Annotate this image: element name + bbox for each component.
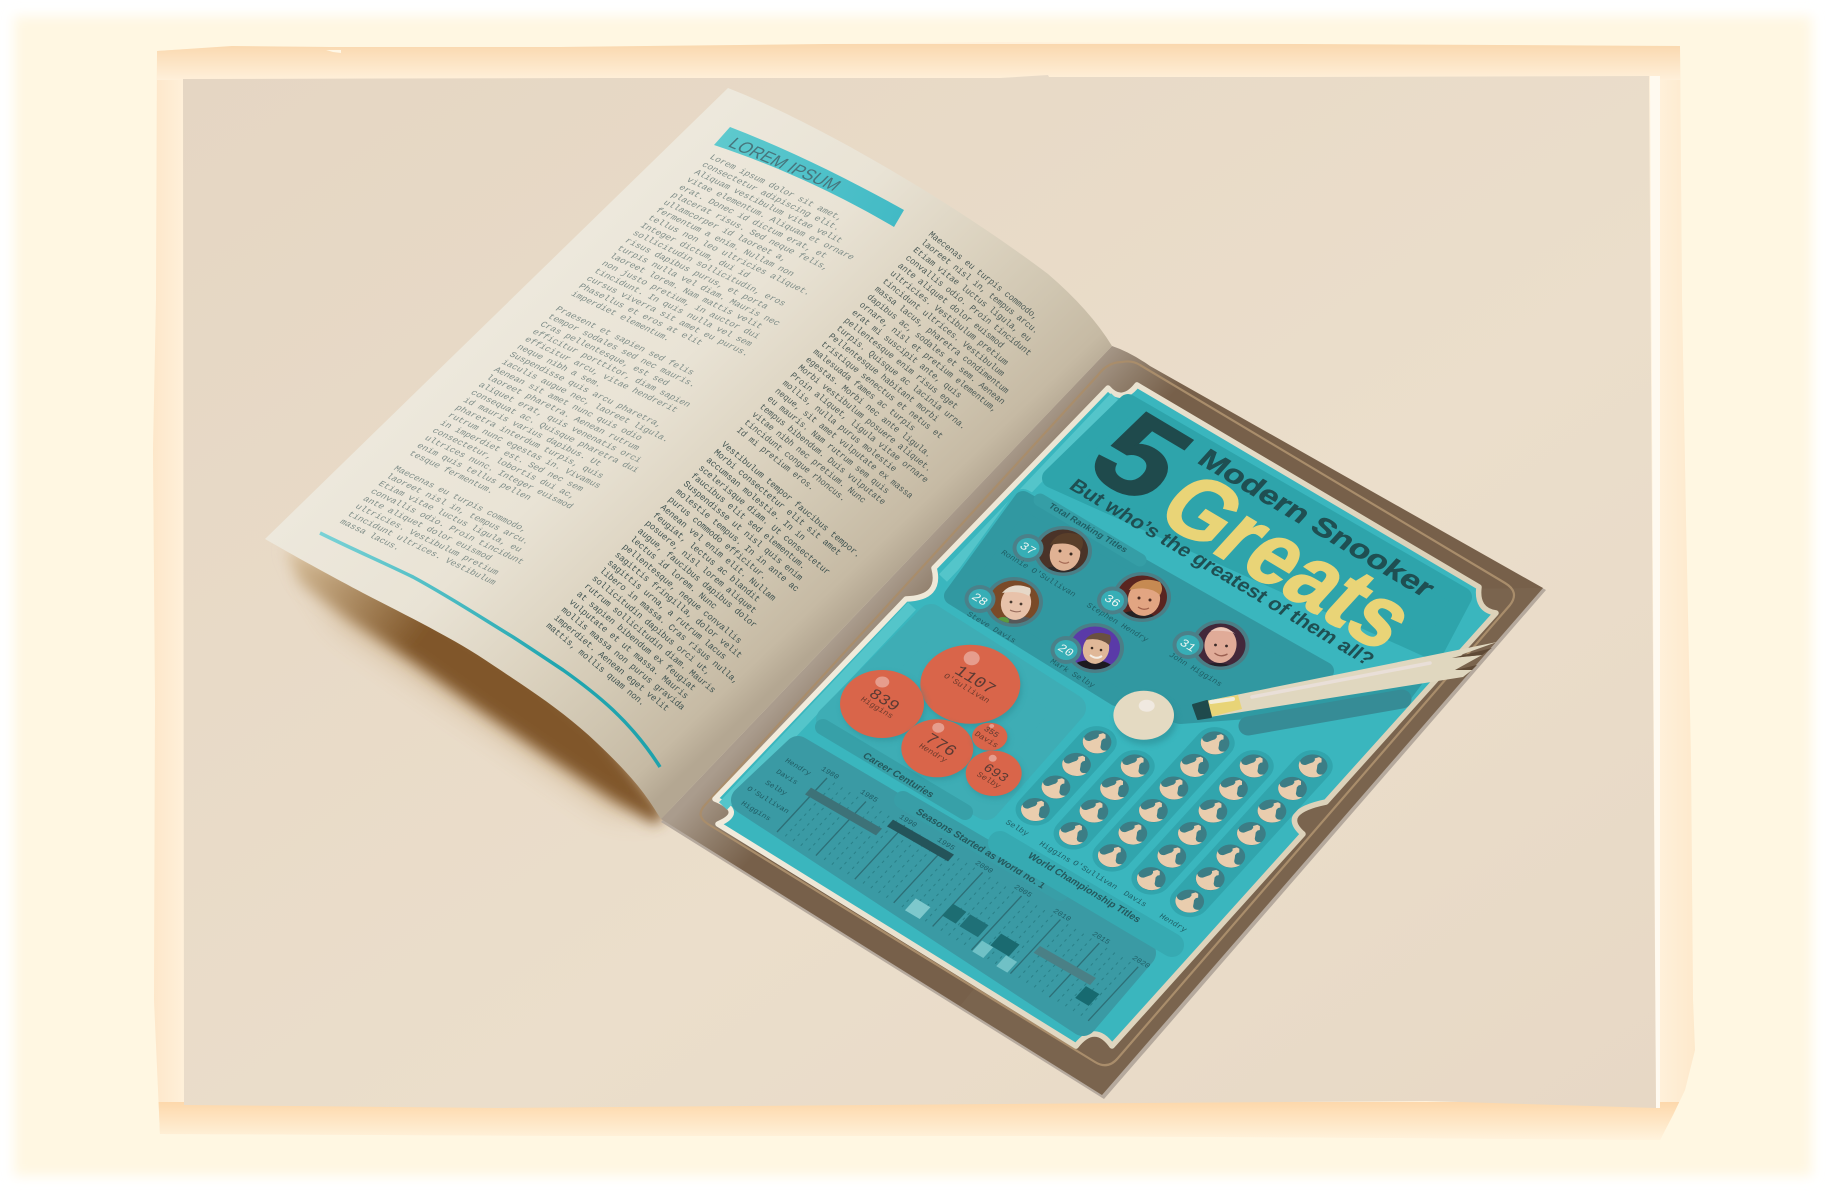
left page column 1 text: risus dapibus purus, et porta: [622, 236, 772, 311]
ball: Selby 693: Selby: [974, 770, 1003, 791]
icon: cue ball: [1113, 691, 1177, 745]
world titles column: O'Sullivan: [1092, 727, 1235, 872]
career centuries label with pill: [823, 727, 965, 812]
left page column 1 text: cursus viverra sit amet eu purus.: [584, 274, 752, 358]
left page column 1 text: neque nibh a sem.: [514, 342, 605, 390]
icon: snooker cue: [1193, 642, 1497, 719]
left page column 1 text: efficitur porttitor, diam sapien: [530, 327, 693, 409]
left page column 2 lower text: pellentesque, neque convallis: [620, 542, 744, 646]
left page column 1 text: laoreet lorem. Nam mattis velit: [607, 251, 766, 331]
left page column 2 upper text: neque, sit amet vulputate ex massa: [772, 387, 915, 501]
left page column 2 lower text: scelerisque diam. Ut consectetur: [696, 464, 832, 577]
timeline year labels: 2000: [973, 860, 994, 876]
left page column 2 upper text: erat mi suscipit ante, quis: [849, 308, 964, 400]
left page column 2 upper text: dapibus ac, sodales et sem. Aenean: [864, 293, 1007, 407]
world titles column labels: Selby: [1003, 819, 1030, 838]
left page column 2 lower text: posuere, nisl lorem aliquet: [643, 519, 758, 616]
timeline year labels: 1995: [935, 837, 956, 853]
left page column 2 upper text: Id mi pretium eros.: [734, 426, 817, 493]
left page column 2 lower text: Aenean vel enim elit. Nullam: [658, 503, 778, 603]
left page column 2 upper text: vitae nibh nec pretium. Nunc: [749, 410, 868, 505]
left page column 1 text: Aliquam vestibulum vitae velit: [691, 168, 845, 245]
magazine left page: [265, 88, 1112, 819]
player: Stephen Hendry, 36 titles: 36: [1101, 592, 1123, 610]
player: Ronnie O'Sullivan, 37 titles: Ronnie O'Sullivan: [999, 549, 1078, 599]
player: Steve Davis, 28 titles: [964, 577, 1044, 645]
left page column 1 text: placerat risus. Sed neque felis,: [668, 190, 832, 272]
career centuries label with pill: Career Centuries: [860, 751, 936, 800]
left page column 1 text: consectetur adipiscing elit.: [699, 160, 843, 233]
left page column 1 text: Integer dictum, dui id: [638, 221, 753, 280]
left page column 1 text: Aenean sit amet nunc quis odio: [491, 365, 645, 443]
total ranking titles label with pill: Total Ranking Titles: [1047, 501, 1130, 554]
world titles column labels: O'Sullivan: [1070, 859, 1119, 892]
shadow under the lifted left page: [285, 548, 665, 824]
left page column 1 text: non justo pretium, in auctor dui: [599, 259, 763, 341]
left page column 1 text: tincidunt ultrices. Vestibulum: [345, 509, 499, 587]
left page column 2 lower text: sagittis fringilla, dolor velit: [612, 550, 744, 661]
left page column 2 lower text: mattis, mollis quam non.: [544, 621, 647, 708]
timeline player row labels: Davis: [774, 769, 799, 787]
timeline year labels: 2020: [1130, 955, 1151, 971]
left page column 2 lower text: augue, faucibus dapibus dolor: [635, 527, 759, 630]
player: Mark Selby, 20 titles: [1048, 623, 1125, 690]
cue shadow: [1240, 680, 1425, 726]
ball: Higgins 839: Higgins: [858, 695, 896, 721]
left page column 1 text: erat. Donec id dictum erat, et: [676, 183, 830, 260]
subtitle: But who’s the greatest of them all?: [1065, 475, 1379, 670]
ball: O'Sullivan 1107: [920, 645, 1022, 728]
left page column 1 text: Lorem ipsum dolor sit amet,: [707, 152, 846, 223]
player: Ronnie O'Sullivan, 37 titles: [999, 526, 1093, 599]
player: Stephen Hendry, 36 titles: [1084, 572, 1172, 644]
left page column 1 text: enim quis tellus pellen: [414, 441, 534, 502]
timeline player row labels: Selby: [763, 780, 788, 798]
player: Stephen Hendry, 36 titles: Stephen Hendry: [1084, 602, 1150, 644]
panel: title: [1052, 404, 1462, 650]
timeline year labels: 1980: [819, 766, 840, 782]
left page column 1 text: massa lacus.: [337, 517, 403, 553]
left page column 2 lower text: Vestibulum tempor faucibus tempor.: [719, 440, 863, 560]
left page column 1 text: in imperdiet est. Sed nec sem: [437, 418, 586, 493]
ball: Higgins 839: [840, 670, 926, 741]
left page column 1 text: laoreet nisl in, tempus arcu.: [383, 471, 532, 547]
left page column 1 text: tincidunt. In quis nulla vel sem: [591, 266, 755, 348]
light felt rail on left edge: [723, 397, 1115, 806]
left page column 1 text: sollicitudin sollicitudin, eros: [630, 228, 789, 308]
left page column 2 lower text: Morbi consectetur elit sit amet: [711, 448, 843, 558]
snooker table felt with cream cushion and pocket notches: [715, 385, 1496, 1046]
left page column 2 lower text: accumsan molestie. In in: [704, 456, 807, 543]
left page column 1 text: Praesent et sapien sed felis: [553, 304, 697, 377]
title: Modern Snooker: Modern Snooker: [1191, 444, 1441, 603]
left page column 1 text: imperdiet elementum.: [568, 289, 673, 343]
left page column 2 lower text: sagittis urna, a rutrum lacus: [605, 558, 728, 662]
timeline player row labels: Higgins: [739, 800, 772, 823]
seasons label with pill: Seasons Started as World no. 1: [913, 807, 1047, 891]
left page column 2 lower text: faucibus elit sed elementum.: [688, 471, 808, 572]
timeline bars: [805, 788, 1099, 1006]
timeline year labels: 2005: [1012, 884, 1033, 900]
left page column 1 text: turpis nulla vel diam. Mauris nec: [614, 244, 783, 328]
world titles column labels: Higgins: [1037, 840, 1073, 865]
timeline year labels: 1990: [897, 814, 918, 830]
timeline year labels: 2015: [1090, 931, 1111, 947]
timeline year labels: 1985: [858, 789, 879, 805]
left page column 1 text: pharetra interdum turpis, quis: [453, 403, 607, 481]
left page column 2 lower text: sollicitudin dapibus orci ut,: [589, 574, 713, 678]
left page column 1 text: Cras pellentesque, est sed: [537, 319, 672, 388]
left page column 2 upper text: convallis odio. Proin tincidunt: [903, 253, 1034, 358]
left page column 1 text: consectetur, lobortis dui ac,: [430, 426, 579, 501]
world titles column labels: Davis: [1121, 890, 1148, 909]
ball: Davis 355: 355: [981, 725, 1000, 740]
world titles column: Selby: [1015, 726, 1117, 826]
magazine right page: brown table cover: [661, 346, 1546, 1099]
player: John Higgins, 31 titles: [1166, 620, 1250, 689]
player: John Higgins, 31 titles: John Higgins: [1166, 651, 1224, 689]
world titles column: Davis: [1131, 750, 1274, 895]
left page column 2 upper text: Etiam vitae luctus ligula, eu: [910, 245, 1033, 344]
left page column 2 upper text: Pellentesque habitant morbi: [826, 332, 941, 424]
left page column 1 text: Maecenas eu turpis commodo,: [391, 464, 530, 534]
panel: world number one timeline: [745, 750, 1142, 1022]
left page column 2 upper text: tincidunt congue rhoncus.: [742, 418, 848, 504]
left page column 1 text: tesque fermentum.: [406, 449, 497, 496]
left page column 1 text: Etiam vitae luctus ligula, eu: [376, 479, 525, 554]
left page column 2 upper text: tempus bibendum. Duis vulputate: [757, 402, 888, 507]
left page column 2 lower text: libero in massa. Cras risus nulla,: [597, 566, 741, 686]
ball: O'Sullivan 1107: O'Sullivan: [941, 672, 992, 705]
left page column 1 text: Phasellus et eros at elit: [576, 282, 706, 347]
left page column 2 lower text: lectus id lorem. Nunc: [627, 534, 719, 612]
left page column 1 text: efficitur arcu, vitae hendrerit: [522, 335, 681, 414]
left page column 1 text: tempor sodales sed nec mauris.: [545, 312, 699, 389]
left page column 1 text: laoreet pharetra. Aenean rutrum: [483, 373, 642, 452]
left page column 2 lower text: purus commodo efficitur.: [666, 495, 769, 582]
left page column 2 upper text: ornare, nisl et pretium elementum,: [857, 300, 999, 415]
left page column 1 text: Suspendisse quis arcu pharetra,: [507, 350, 665, 430]
left page column 2 upper text: Morbi vestibulum posuere aliquet.: [795, 363, 934, 474]
left page column 2 upper text: pellentesque enim risus eget: [841, 316, 960, 411]
timeline year labels: [819, 766, 1151, 971]
panel: total ranking titles: [953, 500, 1325, 715]
left page column 2 upper text: ante aliquet dolor euismod: [895, 261, 1006, 350]
torn paper frame: [150, 40, 1700, 1145]
left page column 2 lower text: feugiat, lectus ac blandit: [650, 511, 762, 605]
left page column 2 upper text: Maecenas eu turpis commodo,: [926, 230, 1041, 322]
left page column 1 text: consequat ac. Quisque pharetra dui: [468, 388, 642, 475]
left page column 2 upper text: tristique senectus et netus et: [818, 340, 945, 441]
player: Mark Selby, 20 titles: Mark Selby: [1048, 658, 1097, 690]
world titles column labels: [1003, 819, 1189, 934]
inner photo of desk surface: [183, 75, 1660, 1108]
left page column 2 upper text: egestas. Morbi nec ante ligula.: [803, 355, 934, 460]
left page column 1 text: tellus non leo ultricies aliquet.: [645, 213, 814, 298]
left page column 2 upper text: malesuada fames ac turpis: [811, 347, 917, 433]
left page column 2 lower text: Suspendisse ut nisl quis enim: [681, 479, 805, 583]
ball: Selby 693: [966, 751, 1023, 799]
world titles column: Hendry: [1169, 750, 1333, 918]
left page column 1 text: ante aliquet dolor euismod: [360, 494, 495, 562]
left page column 2 lower text: at sapien bibendum ex feugiat: [574, 590, 698, 693]
timeline grid lines: [777, 778, 1138, 1021]
world titles label with pill: [1000, 843, 1172, 945]
left page column 1 text: iaculis augue nec, laoreet ligula.: [499, 357, 672, 444]
player: Mark Selby, 20 titles: 20: [1054, 642, 1076, 660]
panel: career centuries: [830, 618, 1072, 806]
world titles label with pill: World Championship Titles: [1025, 851, 1143, 925]
title: big number 5: 5: [1064, 388, 1218, 525]
world titles column labels: Hendry: [1157, 913, 1189, 934]
left page column 2 upper text: laoreet nisl in, tempus arcu.: [918, 238, 1041, 336]
ball: Hendry 776: Hendry: [916, 742, 949, 765]
world titles column: Higgins: [1053, 750, 1155, 850]
title: Greats: Greats: [1139, 454, 1437, 667]
left page column 2 upper text: tincidunt ultrices. Vestibulum: [880, 277, 1006, 379]
ball: O'Sullivan 1107: 1107: [950, 663, 999, 699]
player: Steve Davis, 28 titles: 28: [968, 591, 990, 609]
left page column 2 upper text: eu mauris. Nam rutrum sem quis: [765, 394, 891, 496]
left page column 1 text: ultrices nunc. Integer euismod: [422, 433, 576, 511]
left page column 1 text: ultricies. Vestibulum pretium: [352, 502, 502, 577]
left page column 2 lower text: vulputate et ut massa. Mauris: [566, 598, 690, 701]
ball: Davis 355: [972, 723, 1009, 753]
left page column 1 text: rutrum nunc egestas in. Vivamus: [445, 411, 604, 490]
left page column 2 lower text: mollis massa non purus gravida: [559, 605, 687, 713]
left page column 1 text: convallis odio. Proin tincidunt: [368, 487, 527, 566]
timeline player row labels: [739, 758, 812, 823]
left page column 2 upper text: mollis, nulla purus molestie: [780, 379, 899, 474]
left page column 2 upper text: massa lacus, pharetra condimentum: [872, 285, 1011, 396]
left page column 2 upper text: turpis. Quisque ac lacinia urna.: [834, 324, 968, 432]
left page heading bar: [714, 127, 904, 227]
left page bottom teal rule: [320, 533, 660, 767]
player: Steve Davis, 28 titles: Steve Davis: [964, 611, 1018, 645]
ball: Selby 693: 693: [979, 762, 1011, 786]
left page column 2 lower text: imperdiet. Aenean eget velit: [551, 613, 671, 714]
player: John Higgins, 31 titles: 31: [1176, 637, 1198, 655]
left page column 1 text: vitae elementum. Aliquam et ornare: [684, 175, 857, 262]
ball: Hendry 776: [901, 719, 975, 780]
left page heading bar: LOREM IPSUM: [724, 135, 845, 195]
left page column 1 text: ullamcorper id laoreet a,: [661, 198, 790, 264]
left page column 2 lower text: molestie tempus. In in ante ac: [673, 487, 801, 594]
timeline year labels: 2010: [1051, 908, 1072, 924]
left page column 2 lower text: rutrum sollicitudin diam. Mauris: [582, 582, 718, 695]
left page column 1 text: id mauris varius dapibus. Ut: [460, 395, 605, 468]
left page column 2 upper text: Proin aliquet, ligula vitae ornare: [788, 371, 930, 485]
timeline player row labels: Hendry: [783, 758, 812, 778]
ball: Davis 355: Davis: [972, 730, 1001, 750]
ball: Higgins 839: 839: [865, 686, 903, 715]
left page column 2 upper text: ultricies. Vestibulum pretium: [887, 269, 1010, 368]
timeline player row labels: O'Sullivan: [744, 786, 790, 816]
ball: Hendry 776: 776: [920, 731, 960, 761]
player: Ronnie O'Sullivan, 37 titles: 37: [1016, 540, 1038, 558]
left page column 1 text: aliquet erat, quis venenatis orci: [476, 380, 644, 465]
left page column 1 text: fermentum a enim. Nullam non: [653, 206, 797, 278]
